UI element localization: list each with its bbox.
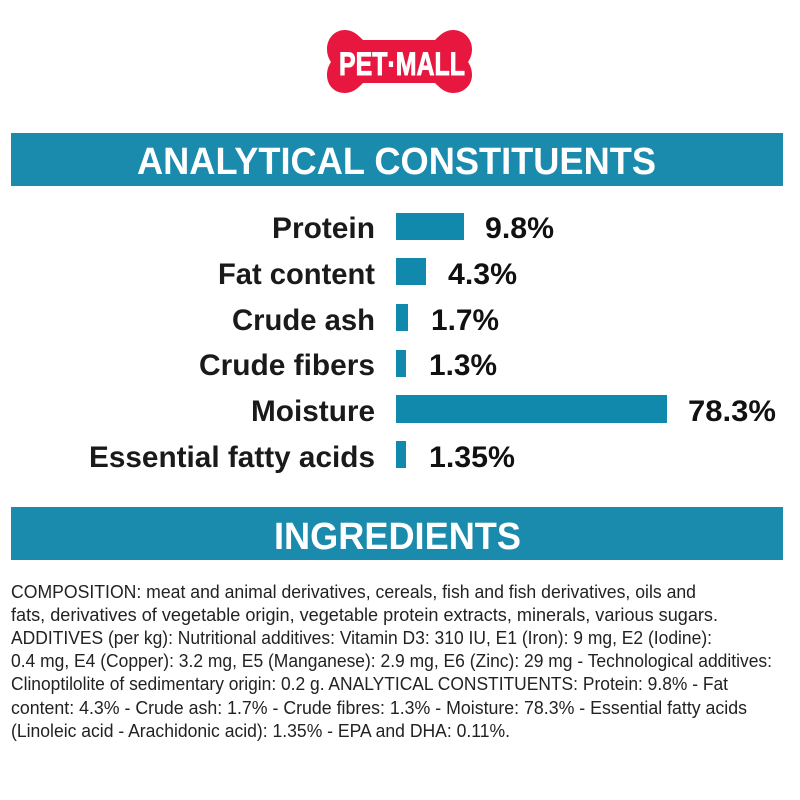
row: protein: Protein [272,212,375,245]
row: crude fibers [199,349,497,382]
text block: composition: 0.4 mg, E4 (Copper): 3.2 mg, E5 (Manganese): 2.9 mg, E6 (Zinc): 29 mg - Technological additives: [11,650,772,671]
text block: composition: ADDITIVES (per kg): Nutritional additives: Vitamin D3: 310 IU, E1 (Iron): 9 mg, E2 (Iodine): [11,627,712,648]
heading band: analytical constituents: ANALYTICAL CONSTITUENTS [137,141,656,183]
logo: Pet-Mall bone: PET·MALL [339,46,465,82]
heading band: ingredients [11,507,783,560]
row: crude ash: 1.7% [431,304,499,337]
row: moisture: 78.3% [688,395,776,428]
row: moisture: Moisture [251,395,375,428]
row: essential fatty acids: 1.35% [429,441,515,474]
row: fat content: 4.3% [448,258,517,291]
row: moisture [251,395,776,428]
heading band: ingredients: INGREDIENTS [274,516,521,558]
text block: composition: (Linoleic acid - Arachidonic acid): 1.35% - EPA and DHA: 0.11%. [11,720,510,741]
row: fat content: Fat content [218,258,375,291]
row: fat content [218,258,517,291]
row: protein [272,212,554,245]
row: crude ash [232,304,499,337]
row: crude fibers: 1.3% [429,349,497,382]
row: essential fatty acids: Essential fatty acids [89,441,375,474]
heading band: analytical constituents [11,133,783,186]
text block: composition: content: 4.3% - Crude ash: 1.7% - Crude fibres: 1.3% - Moisture: 78.3% - Essential fatty acids [11,697,747,718]
row: crude fibers: Crude fibers [199,349,375,382]
text block: composition: fats, derivatives of vegetable origin, vegetable protein extracts, minerals, various sugars. [11,604,718,625]
bar chart: analytical constituents [89,212,776,474]
text block: composition: Clinoptilolite of sedimentary origin: 0.2 g. ANALYTICAL CONSTITUENTS: Protein: 9.8% - Fat [11,673,728,694]
text block: composition [11,581,772,741]
row: protein: 9.8% [485,212,554,245]
row: essential fatty acids [89,441,515,474]
logo: Pet-Mall bone [327,30,472,93]
row: crude ash: Crude ash [232,304,375,337]
text block: composition: COMPOSITION: meat and animal derivatives, cereals, fish and fish derivatives, oils and [11,581,696,602]
